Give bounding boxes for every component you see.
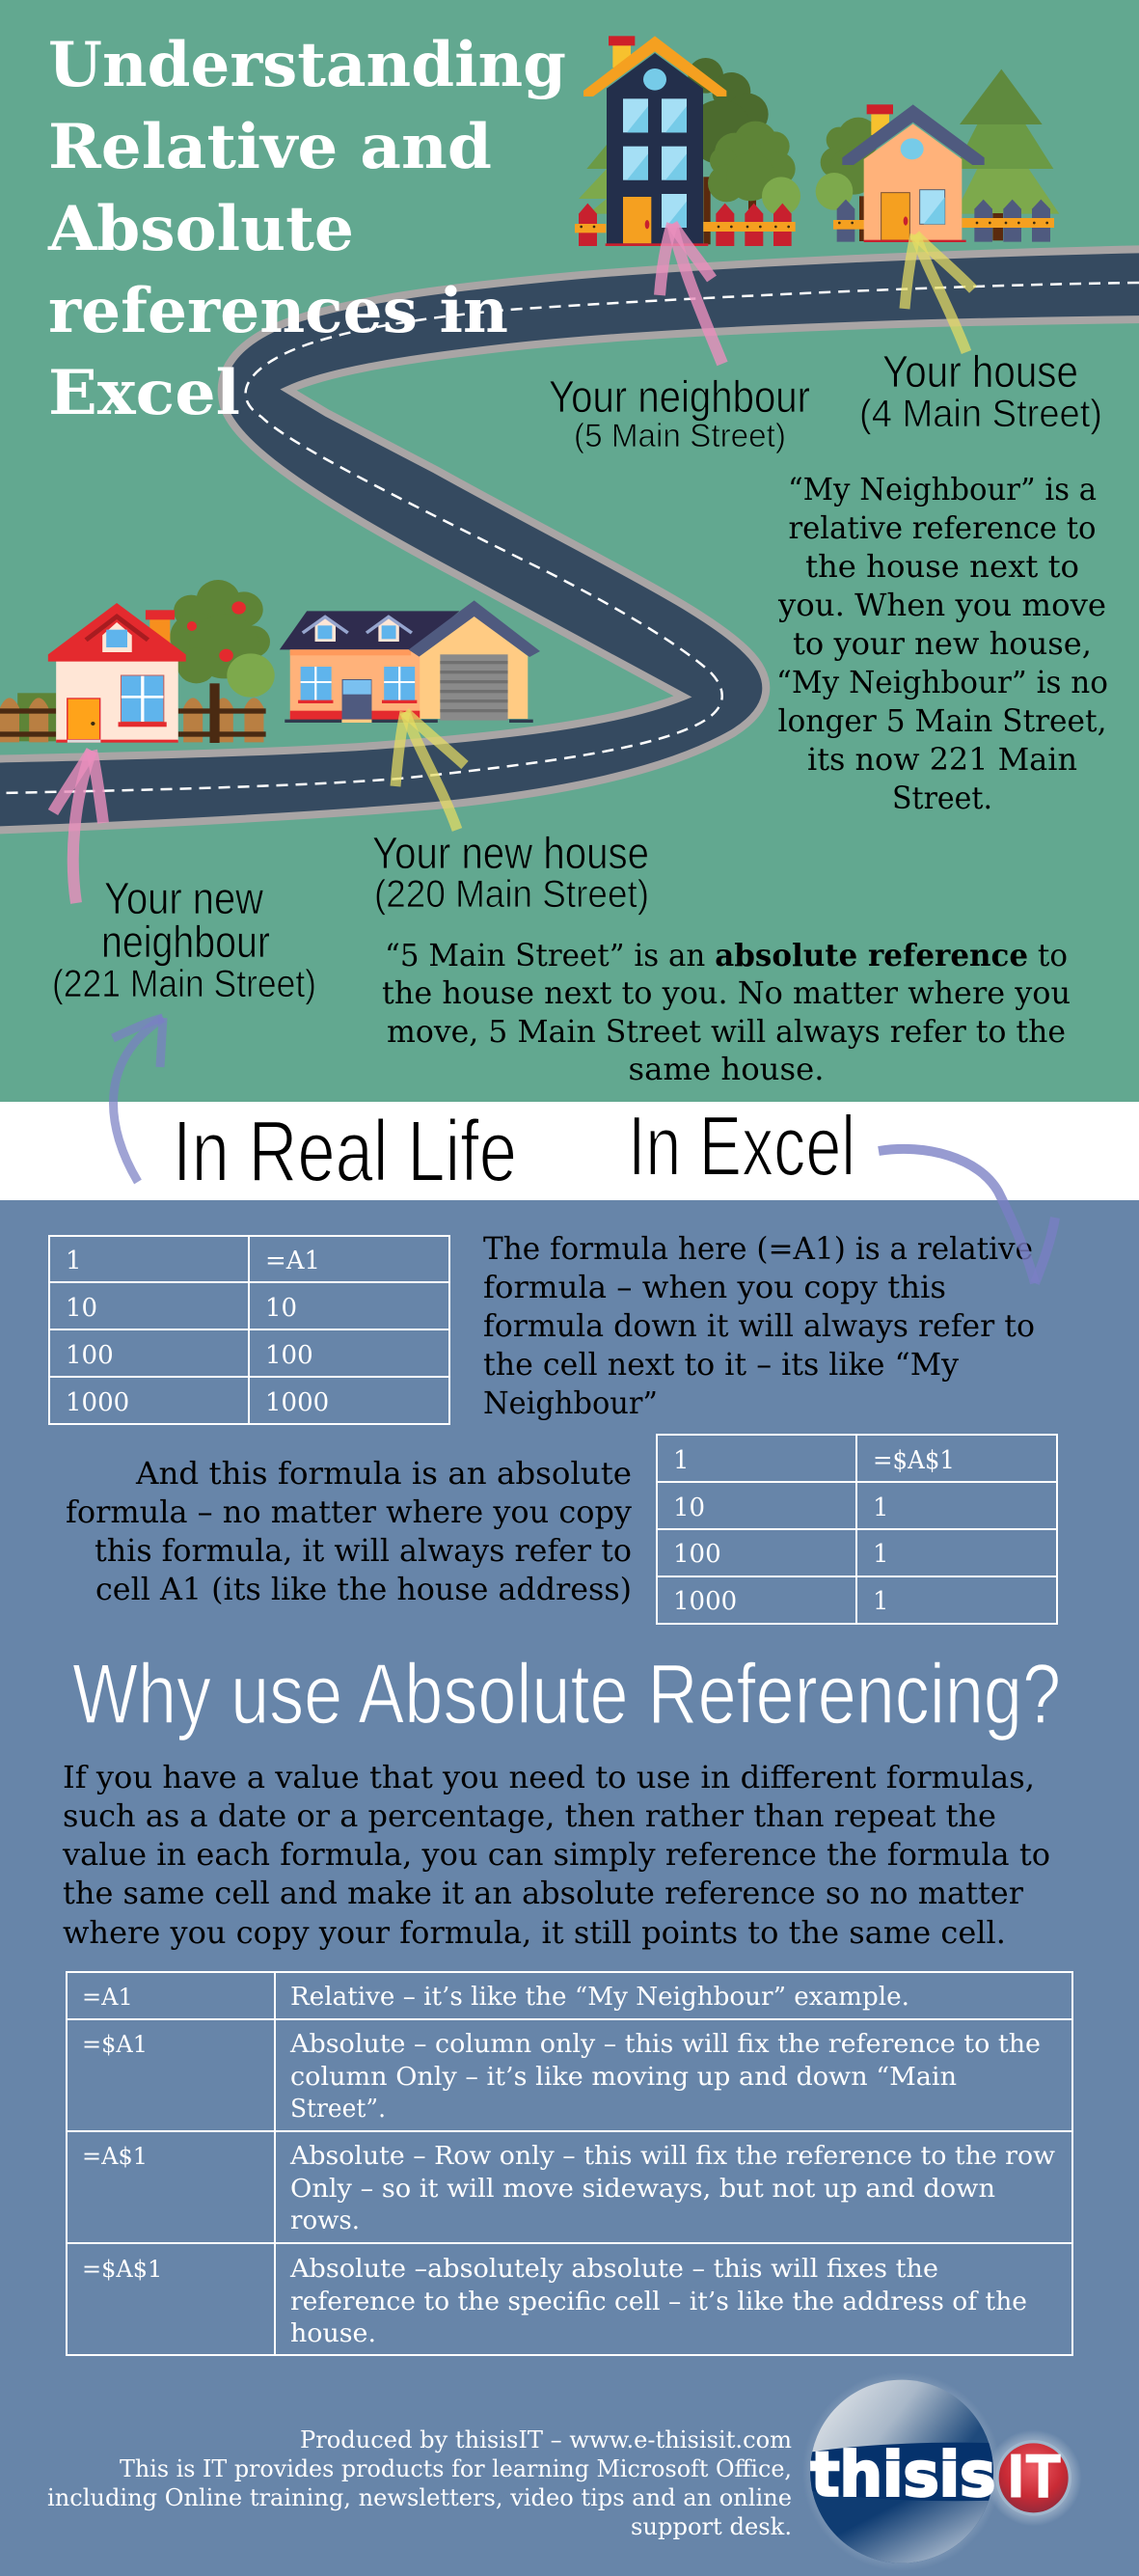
illustration: neighbour house with trees and fence	[575, 36, 800, 246]
label: your neighbour: Your neighbour	[549, 371, 810, 422]
table: reference types: =A$1	[82, 2143, 148, 2170]
text: relative formula explanation: the cell next to it – its like “My	[483, 1348, 959, 1383]
text: why use absolute paragraph: where you copy your formula, it still points to the same cell.	[63, 1916, 1006, 1951]
label: your new house	[372, 828, 649, 916]
icon: thisisIT logo: IT	[1006, 2442, 1061, 2511]
label: your new house: Your new house	[372, 828, 649, 878]
table: reference types: =$A$1	[82, 2256, 162, 2283]
table: absolute formula	[657, 1435, 1057, 1624]
text: my neighbour explanation: longer 5 Main Street,	[777, 704, 1107, 739]
table: reference types: house.	[290, 2318, 376, 2348]
text: why use absolute paragraph	[62, 1761, 1050, 1951]
text: why use absolute paragraph: such as a date or a percentage, then rather than repeat the	[63, 1799, 996, 1834]
title: Absolute	[47, 193, 354, 265]
text: my neighbour explanation: the house next to	[805, 550, 1079, 585]
table: reference types: =A1	[82, 1984, 133, 2011]
text: absolute reference explanation: “5 Main Street” is an absolute reference to	[385, 938, 1068, 973]
panel: blue excel background	[0, 1200, 1139, 2576]
panel: white band	[0, 1102, 1139, 1200]
table: absolute formula: 1	[873, 1494, 889, 1522]
text: footer credits: including Online training, newsletters, video tips and an online	[47, 2484, 792, 2511]
text: footer credits	[47, 2426, 792, 2540]
text: relative formula explanation: formula – when you copy this	[483, 1271, 946, 1305]
table: absolute formula: 1	[673, 1446, 690, 1475]
text: why use absolute paragraph: the same cell and make it an absolute reference so no matter	[63, 1877, 1024, 1911]
label: your new neighbour: Your new	[104, 873, 264, 923]
road	[0, 249, 1139, 831]
text: my neighbour explanation: to your new house,	[793, 627, 1092, 662]
table: reference types: Relative – it’s like the “My Neighbour” example.	[290, 1982, 909, 2012]
table: reference types: rows.	[290, 2206, 360, 2235]
arrow: blue from In Real Life up	[113, 1018, 163, 1182]
panel: green real life background	[0, 0, 1139, 1102]
text: relative formula explanation: The formula here (=A1) is a relative	[483, 1232, 1033, 1267]
text: footer credits: support desk.	[631, 2513, 792, 2540]
label: your house	[859, 346, 1102, 435]
text: footer credits: This is IT provides products for learning Microsoft Office,	[120, 2455, 792, 2482]
text: relative formula explanation: Neighbour”	[483, 1386, 658, 1421]
text: relative formula explanation	[483, 1232, 1035, 1421]
table: relative formula: 1000	[66, 1388, 129, 1417]
table: reference types: Absolute – Row only – this will fix the reference to the row	[289, 2141, 1055, 2171]
heading: in excel: In Excel	[628, 1098, 855, 1193]
arrow: blue from In Excel down	[879, 1149, 1055, 1283]
table: reference types: column Only – it’s like moving up and down “Main	[290, 2062, 957, 2092]
text: absolute reference explanation: move, 5 Main Street will always refer to the	[387, 1015, 1066, 1050]
label: your house: (4 Main Street)	[859, 393, 1102, 435]
table: reference types: reference to the specific cell – it’s like the address of the	[290, 2287, 1027, 2316]
table: relative formula: 1	[66, 1247, 82, 1275]
text: my neighbour explanation: “My Neighbour” is a	[788, 473, 1097, 507]
text: relative formula explanation: formula down it will always refer to	[483, 1309, 1035, 1344]
text: absolute reference explanation: same house.	[629, 1053, 824, 1087]
arrow: yellow to new house	[395, 712, 465, 830]
table: absolute formula: 1	[873, 1540, 889, 1569]
icon: thisisIT logo: thisis	[811, 2439, 995, 2510]
table: relative formula: 100	[66, 1341, 114, 1370]
text: my neighbour explanation	[776, 473, 1108, 816]
table: absolute formula: 1	[873, 1587, 889, 1616]
label: your new neighbour: (221 Main Street)	[52, 963, 316, 1005]
text: why use absolute paragraph: If you have a value that you need to use in different formulas,	[63, 1761, 1035, 1795]
label: your new neighbour	[52, 873, 316, 1005]
table: relative formula: =A1	[265, 1247, 320, 1275]
table: reference types: =$A1	[82, 2031, 148, 2058]
illustration: new neighbour house with apple tree	[0, 580, 275, 743]
text: my neighbour explanation: relative reference to	[789, 511, 1096, 546]
table: absolute formula: 100	[673, 1540, 721, 1569]
table: reference types: Absolute – column only – this will fix the reference to the	[289, 2029, 1041, 2059]
text: absolute reference explanation: the house next to you. No matter where you	[382, 976, 1071, 1011]
text: my neighbour explanation: its now 221 Main	[807, 743, 1077, 778]
title	[47, 29, 566, 429]
text: my neighbour explanation: “My Neighbour” is no	[776, 666, 1108, 700]
title: Understanding	[48, 29, 566, 101]
label: your neighbour	[549, 371, 810, 454]
arrow: pink to neighbour	[660, 224, 722, 364]
arrow: pink to new neighbour	[53, 751, 103, 903]
title: Excel	[48, 357, 240, 429]
table: absolute formula: =$A$1	[873, 1446, 955, 1475]
text: absolute formula explanation: cell A1 (its like the house address)	[95, 1573, 632, 1607]
table: reference types: Street”.	[290, 2094, 386, 2124]
illustration: your house with trees and fence	[816, 69, 1059, 242]
table: relative formula: 10	[66, 1294, 97, 1323]
text: my neighbour explanation: Street.	[892, 781, 992, 816]
label: your new neighbour: neighbour	[101, 917, 270, 967]
title: references in	[48, 275, 508, 347]
text: why use absolute paragraph: value in each formula, you can simply reference the formula to	[62, 1838, 1050, 1873]
illustration: your new house with garage	[280, 600, 540, 723]
label: your house: Your house	[882, 346, 1078, 397]
text: absolute formula explanation: formula – no matter where you copy	[66, 1495, 632, 1530]
table: absolute formula: 1000	[673, 1587, 737, 1616]
table: reference types: Absolute –absolutely absolute – this will fixes the	[289, 2254, 938, 2284]
arrow: yellow to your house	[905, 234, 973, 352]
title: Relative and	[48, 111, 492, 183]
text: footer credits: Produced by thisisIT – www.e-thisisit.com	[300, 2426, 792, 2453]
table: relative formula	[49, 1236, 449, 1424]
table: relative formula: 10	[265, 1294, 297, 1323]
label: your neighbour: (5 Main Street)	[574, 418, 786, 454]
table: relative formula: 100	[265, 1341, 313, 1370]
table: reference types	[67, 1972, 1072, 2355]
text: my neighbour explanation: you. When you move	[777, 589, 1106, 623]
table: absolute formula: 10	[673, 1494, 705, 1522]
icon: thisisIT logo	[802, 2371, 1082, 2571]
text: absolute formula explanation	[66, 1457, 632, 1607]
text: absolute formula explanation: And this formula is an absolute	[135, 1457, 632, 1492]
heading: in real life: In Real Life	[173, 1104, 517, 1200]
table: reference types: Only – so it will move sideways, but not up and down	[290, 2174, 995, 2204]
text: absolute reference explanation	[382, 938, 1071, 1087]
text: absolute formula explanation: this formula, it will always refer to	[95, 1534, 632, 1569]
table: relative formula: 1000	[265, 1388, 329, 1417]
label: your new house: (220 Main Street)	[374, 873, 649, 916]
